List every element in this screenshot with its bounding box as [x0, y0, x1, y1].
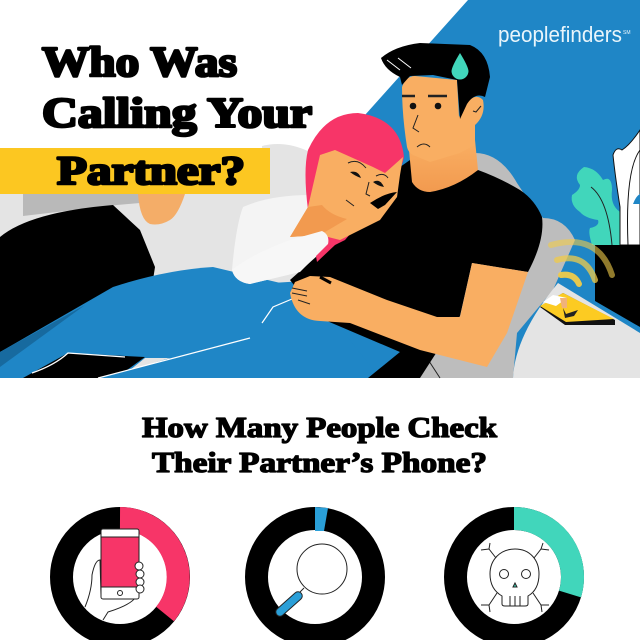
woman head: [290, 113, 404, 262]
phone on sofa: [540, 293, 615, 325]
hero illustration: [0, 0, 640, 378]
blue diagonal background: [0, 0, 640, 378]
icon: hand holding phone: [85, 529, 144, 620]
main title: Calling Your: [42, 91, 312, 137]
woman white top: [232, 195, 328, 284]
man shirt: [290, 160, 542, 378]
main title: Partner?: [57, 148, 245, 193]
woman foot: [138, 194, 185, 224]
blue blanket: [0, 267, 380, 378]
sofa: [0, 144, 640, 378]
section heading: How Many People Check: [142, 413, 498, 444]
main title: [42, 40, 312, 193]
peoplefinders logo: peoplefinders: [498, 22, 622, 47]
woman sleeve: [232, 231, 328, 284]
woman legs: [0, 205, 155, 352]
icon: skull and crossbones: [481, 543, 549, 612]
main title: Who Was: [42, 40, 237, 86]
donut 2: magnifier: [256, 507, 374, 636]
plants: [572, 130, 640, 245]
man arm and hand: [290, 263, 528, 367]
peoplefinders logo: SM: [623, 30, 630, 36]
section heading: [142, 413, 498, 479]
man face: [402, 76, 484, 162]
donut 3: skull: [456, 518, 573, 636]
signal waves: [551, 242, 612, 284]
side table: [595, 245, 640, 327]
man hair: [381, 43, 490, 119]
sweat drop: [452, 53, 468, 80]
man neck: [409, 130, 478, 192]
donut 1: phone: [62, 518, 178, 636]
section heading: Their Partner’s Phone?: [152, 448, 487, 479]
icon: magnifying glass: [280, 544, 347, 612]
title background banner: [0, 148, 270, 194]
